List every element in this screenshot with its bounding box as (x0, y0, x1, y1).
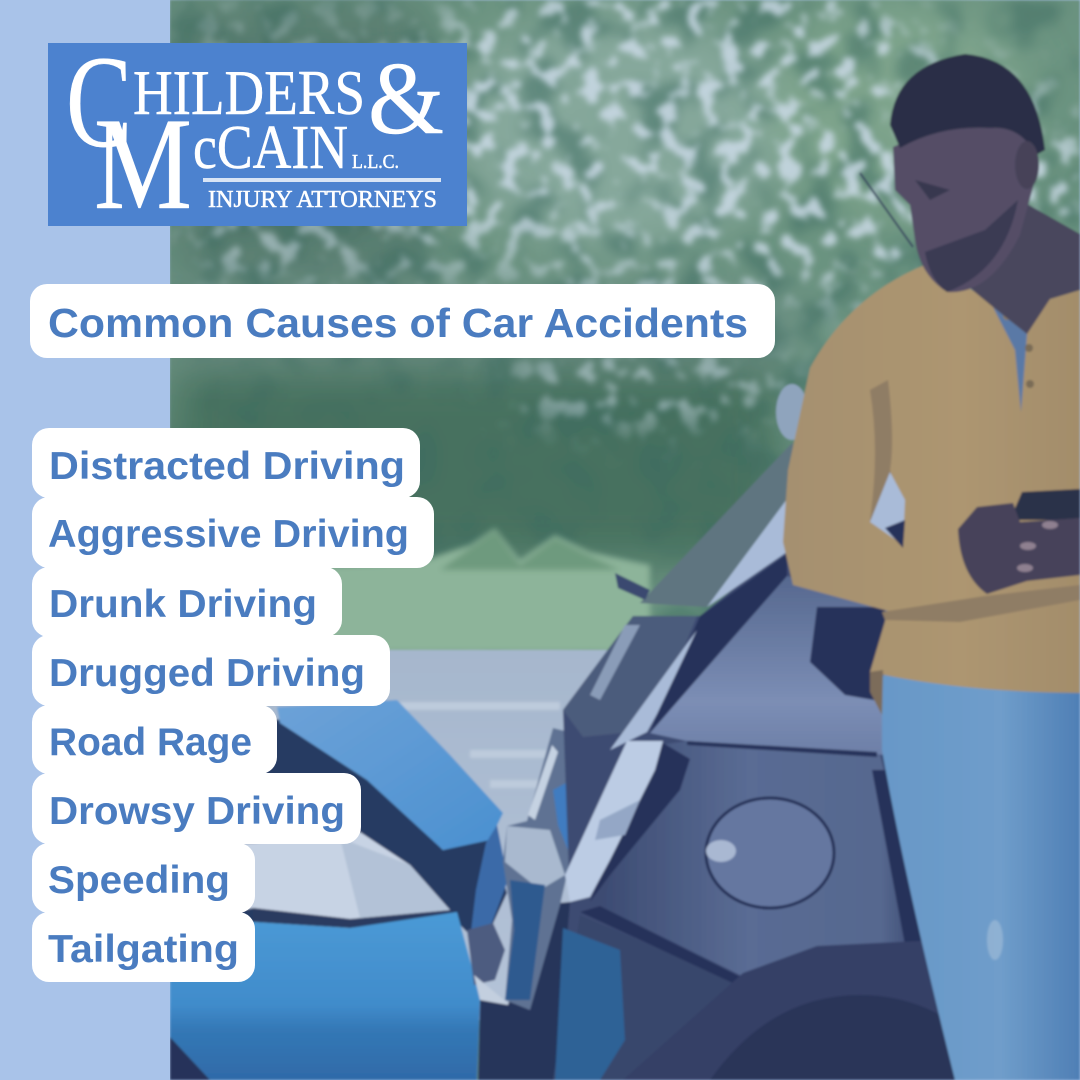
item: tailgating: Tailgating (48, 928, 239, 971)
grass (331, 526, 653, 650)
list: causes of accidents (32, 428, 434, 982)
man: jeans (882, 675, 1080, 1080)
item: drunk driving (32, 567, 342, 637)
crumpled debris between the cars (476, 727, 572, 1080)
logo: cCAIN (193, 114, 348, 182)
item: drugged driving (32, 635, 390, 706)
logo: & (368, 41, 444, 156)
logo: L.L.C. (352, 151, 399, 173)
foliage tones (170, 0, 1030, 565)
logo (48, 28, 467, 237)
heading: Common Causes of Car Accidents (48, 300, 748, 346)
item: aggressive driving (32, 497, 434, 568)
item: distracted driving (32, 428, 420, 498)
item: speeding (32, 843, 255, 913)
logo: C (66, 28, 132, 175)
item: drunk driving: Drunk Driving (49, 583, 317, 626)
logo: INJURY ATTORNEYS (208, 187, 437, 213)
man: hands and phone (958, 489, 1080, 594)
item: tailgating (32, 912, 255, 982)
item: road rage (32, 705, 277, 774)
dark car body (553, 172, 956, 1080)
item: drowsy driving (32, 773, 361, 844)
item: aggressive driving: Aggressive Driving (48, 513, 409, 556)
item: drowsy driving: Drowsy Driving (49, 790, 345, 833)
blue car: grille, hood, headlight and bumper (170, 700, 510, 1080)
man: sweater (783, 264, 1080, 715)
heading (30, 284, 775, 358)
item: distracted driving: Distracted Driving (49, 445, 405, 488)
item: drugged driving: Drugged Driving (49, 652, 365, 695)
left color panel (0, 0, 170, 1080)
road (266, 648, 608, 1020)
man: neck and head (890, 54, 1080, 334)
logo: HILDERS (133, 58, 365, 128)
item: speeding: Speeding (48, 859, 230, 902)
logo: M (94, 90, 192, 237)
item: road rage: Road Rage (49, 721, 252, 764)
